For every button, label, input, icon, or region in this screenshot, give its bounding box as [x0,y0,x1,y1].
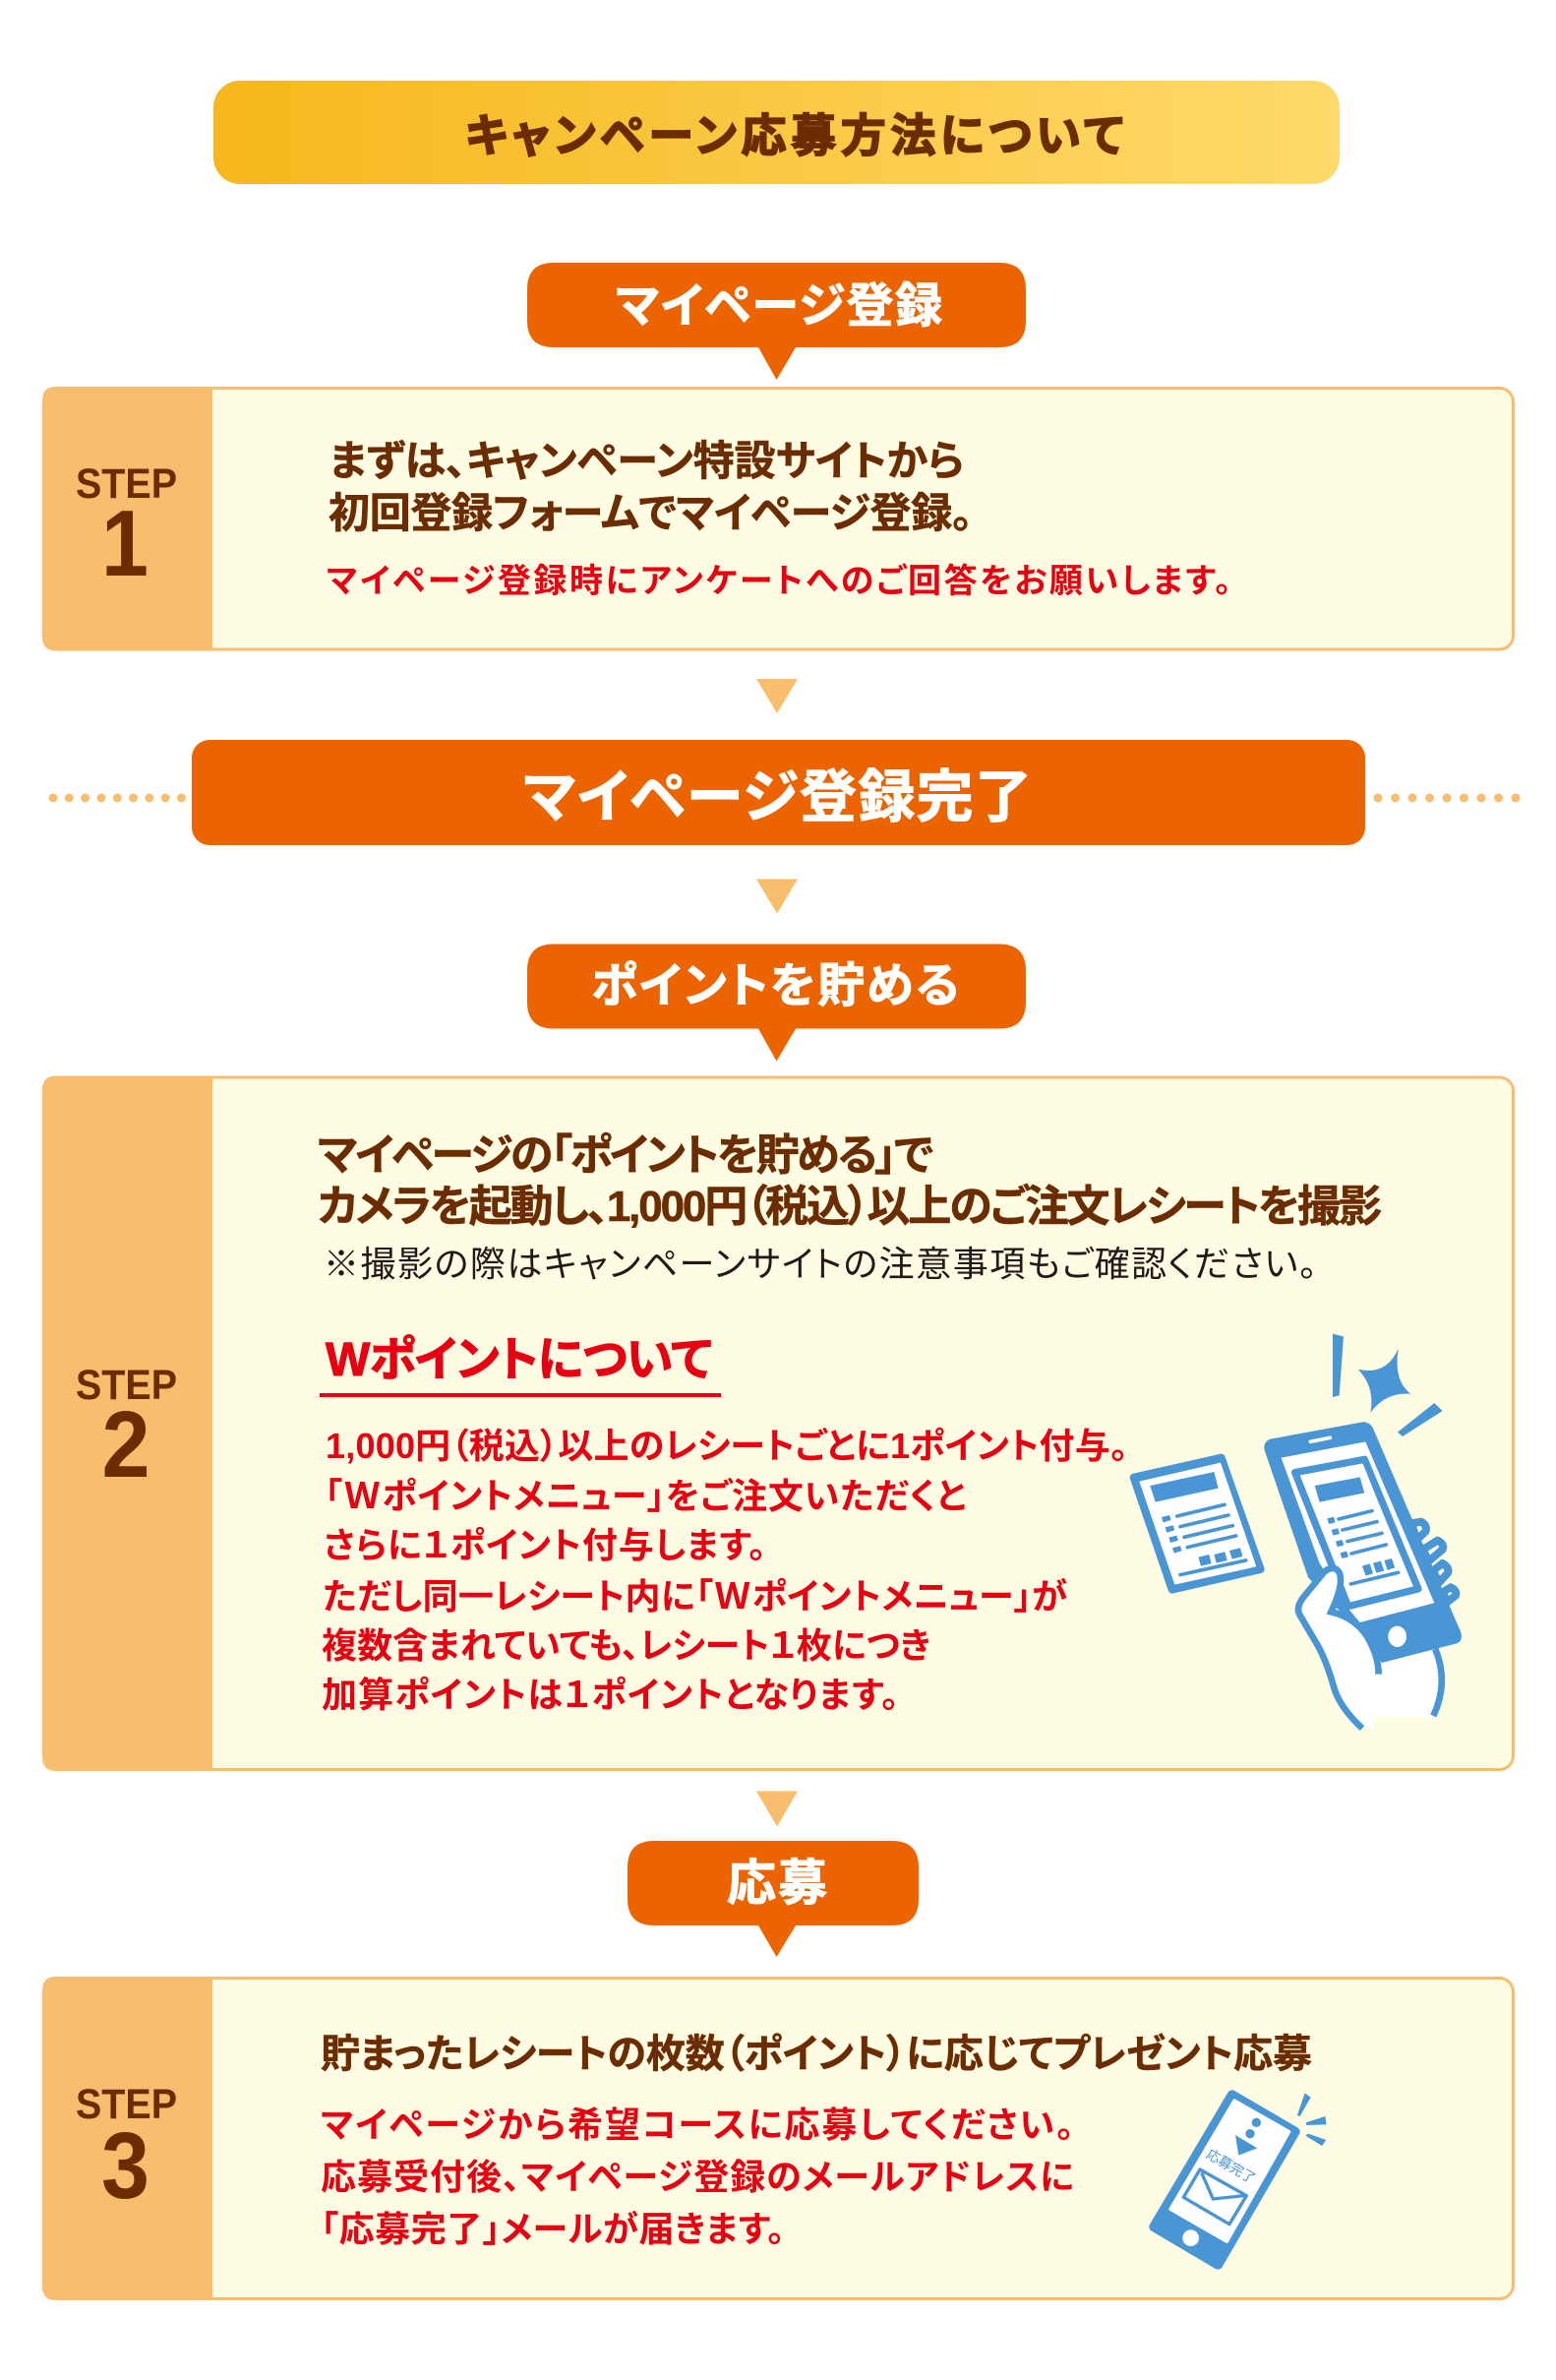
icon: smartphone [1264,1422,1462,1663]
W point description: 1,000円（税込）以上のレシートごとに1ポイント付与。 [326,1426,1128,1466]
arrow [756,880,798,913]
callout: apply [628,1841,919,1957]
icon: fingers [1411,1522,1456,1602]
icon: thumb and palm [1298,1568,1379,1675]
step 2 heading: マイページの「ポイントを貯める」で [318,1131,933,1180]
step 3 heading: 貯まったレシートの枚数（ポイント）に応じてプレゼント応募 [321,2033,1312,2076]
W point description [322,1426,1128,1715]
step 3 description: 「応募完了」メールが届きます。 [321,2209,785,2249]
arrow [756,679,798,713]
step 1 note: マイページ登録時にアンケートへのご回答をお願いします。 [327,563,1231,600]
icon: smartphone with mail [1154,2093,1327,2265]
icon: sparkle [1333,1334,1443,1436]
step 1 heading: 初回登録フォームでマイページ登録。 [329,490,973,536]
step 1 label [76,460,177,596]
registration complete bar: マイページ登録完了 [523,765,1032,829]
title banner [213,81,1340,184]
panel: step 1 [42,387,1513,651]
step 2 heading: カメラを起動し、1,000円（税込）以上のご注文レシートを撮影 [318,1183,1382,1231]
callout: my page registration [527,263,1026,380]
W point description: 加算ポイントは１ポイントとなります。 [322,1675,899,1715]
registration complete bar [53,740,1517,845]
step 2 label: 2 [102,1392,150,1497]
icon: paper receipt [1134,1458,1261,1590]
W point description: 複数含まれていても、レシート１枚につき [322,1625,930,1666]
step 2 note: ※撮影の際はキャンペーンサイトの注意事項もご確認ください。 [324,1244,1317,1284]
icon: smartphone with mail: 応募完了 [1204,2146,1258,2186]
callout: my page registration: マイページ登録 [616,280,942,333]
step 2 heading [318,1131,1382,1231]
step 2 label: STEP [76,1362,177,1409]
step 1 heading: まずは、キャンペーン特設サイトから [329,438,964,484]
step 2 label [76,1362,177,1497]
step 1 label: 1 [101,491,149,596]
step 1 label: STEP [76,460,177,508]
W point description: 「Ｗポイントメニュー」をご注文いただくと [325,1476,966,1516]
step 3 label [76,2081,177,2219]
W point description: さらに１ポイント付与します。 [324,1525,766,1565]
hand base [1298,1571,1442,1729]
step 3 label: STEP [76,2081,177,2128]
step 3 description [321,2105,1074,2249]
step 1 heading [329,438,973,536]
callout: earn points [527,945,1026,1061]
step 3 description: 応募受付後、マイページ登録のメールアドレスに [321,2157,1074,2197]
W point heading: Wポイントについて [326,1334,712,1386]
step 3 description: マイページから希望コースに応募してください。 [321,2105,1074,2145]
panel: step 3 [42,1977,1513,2300]
callout: apply: 応募 [727,1856,827,1911]
panel: step 2 [42,1076,1513,1771]
title: キャンペーン応募方法について [465,110,1123,161]
callout: earn points: ポイントを貯める [591,960,959,1012]
icon: receipt and smartphone in hand [1134,1334,1462,1729]
step 3 label: 3 [101,2113,150,2219]
arrow [756,1791,798,1826]
W point description: ただし同一レシート内に「Ｗポイントメニュー」が [323,1576,1067,1617]
